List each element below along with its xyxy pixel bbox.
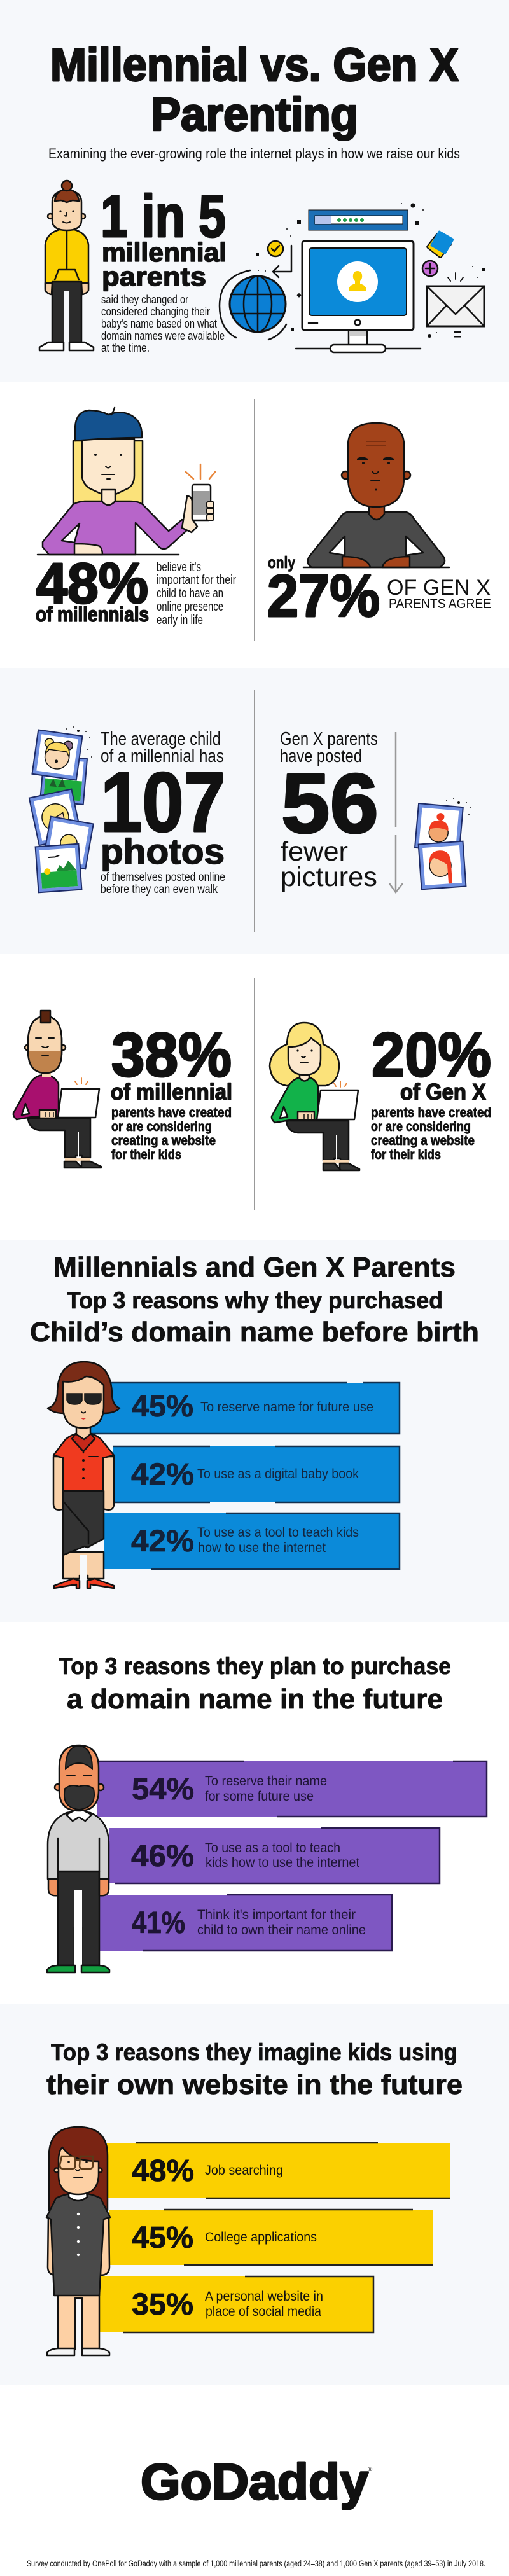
bar: 41% own name xyxy=(99,1895,392,1951)
figure: woman with glasses xyxy=(46,2127,110,2355)
text: online presence belief xyxy=(157,560,236,627)
icon: sparkles xyxy=(256,203,485,338)
text: millennial website xyxy=(111,1105,232,1162)
title: Millennial vs. Gen X xyxy=(50,39,459,91)
bar: 42% baby book: To use as a digital baby book xyxy=(197,1467,359,1481)
heading: their own website in the future xyxy=(46,2069,463,2100)
bar: 46% teach: 46% xyxy=(131,1839,194,1873)
subtitle: Examining the ever-growing role the internet plays in how we raise our kids xyxy=(48,146,460,162)
bar: 45% college applications: College applications xyxy=(205,2230,317,2245)
heading: a domain name in the future xyxy=(67,1684,443,1715)
panel: website creation comparison xyxy=(0,954,509,1240)
figure: woman with phone xyxy=(38,408,215,555)
bar: 48% job searching: Job searching xyxy=(205,2163,283,2178)
stat: 20% of Gen X: 20% xyxy=(372,1020,491,1090)
bar: 45% college applications xyxy=(109,2210,433,2265)
arrow: down xyxy=(389,732,403,892)
heading xyxy=(59,1653,451,1715)
figure: Gen X man xyxy=(303,423,449,567)
heading: Child’s domain name before birth xyxy=(30,1317,479,1348)
bar: 41% own name: Think it's important for their xyxy=(197,1908,356,1922)
stat: only 27% of Gen X: 27% xyxy=(267,562,380,629)
stat: 107 photos: 107 xyxy=(101,756,225,850)
text: fewer pictures: pictures xyxy=(281,862,377,892)
stat: 1 in 5: millennial xyxy=(102,237,227,267)
figure: woman with sunglasses xyxy=(48,1362,120,1588)
panel: intro xyxy=(0,0,509,382)
heading: Top 3 reasons they imagine kids using xyxy=(51,2039,457,2065)
divider xyxy=(254,690,255,932)
text: millennial website: for their kids xyxy=(111,1147,181,1162)
bar: 54% reserve: 54% xyxy=(132,1773,194,1806)
bar: 46% teach: kids how to use the internet xyxy=(206,1855,359,1870)
divider xyxy=(254,399,255,641)
panel: photos comparison xyxy=(0,668,509,954)
heading: Millennials and Gen X Parents xyxy=(53,1252,456,1283)
title xyxy=(50,39,459,141)
bar: 46% teach: To use as a tool to teach xyxy=(205,1841,340,1855)
text: posted online: of themselves posted online xyxy=(101,871,225,884)
text: average child xyxy=(101,729,224,766)
stat: 48% of millennials: 48% xyxy=(36,552,148,616)
panel: reasons kids use websites xyxy=(0,2004,509,2385)
text: online presence belief: important for their xyxy=(157,573,236,587)
text: average child: of a millennial has xyxy=(101,746,224,766)
stat: 38% of millennial: of millennial xyxy=(111,1079,232,1105)
stat: 1 in 5: parents xyxy=(102,261,206,291)
text: Gen X parents: have posted xyxy=(280,746,362,766)
stat: only 27% of Gen X: PARENTS AGREE xyxy=(389,597,491,611)
text: millennial website: creating a website xyxy=(111,1133,216,1148)
bar: 41% own name: child to own their name online xyxy=(197,1923,366,1937)
icon: stack of photos xyxy=(29,726,94,892)
text: Gen X website xyxy=(371,1105,491,1162)
bar: 45% reserve name: 45% xyxy=(132,1390,193,1423)
arrow: monitor to globe xyxy=(273,246,291,277)
text: millennial website: parents have created xyxy=(111,1105,232,1120)
icon: two red-haired photos xyxy=(415,798,471,889)
icon: computer monitor xyxy=(296,241,421,352)
bar: 42% teach kids: how to use the internet xyxy=(198,1541,326,1555)
text: domain name stat: baby's name based on what xyxy=(101,317,217,330)
text: domain name stat: considered changing their xyxy=(101,305,210,318)
bar: 41% own name: 41% xyxy=(132,1906,185,1940)
panel: online presence comparison xyxy=(0,382,509,668)
icon: envelope xyxy=(427,273,484,326)
heading: Top 3 reasons they plan to purchase xyxy=(59,1653,451,1679)
figure: seated man with laptop xyxy=(13,1011,101,1168)
logo: GoDaddy: ® xyxy=(368,2466,373,2473)
text: domain name stat: at the time. xyxy=(101,342,150,354)
text: online presence belief: child to have an xyxy=(157,586,223,600)
figure: man in yellow hoodie xyxy=(39,181,94,350)
figure: seated woman with laptop xyxy=(270,1023,359,1170)
text: online presence belief: believe it's xyxy=(157,560,201,574)
bar: 42% baby book xyxy=(113,1446,400,1502)
text: domain name stat: said they changed or xyxy=(101,293,188,306)
text: millennial website: or are considering xyxy=(111,1119,212,1134)
icon: browser bar xyxy=(309,210,408,230)
stat: 48% of millennials: of millennials xyxy=(36,602,149,626)
text: Gen X website: parents have created xyxy=(371,1105,491,1120)
title: Parenting xyxy=(151,89,358,141)
bar: 35% personal website: 35% xyxy=(132,2288,193,2322)
stat: 38% of millennial: 38% xyxy=(111,1020,232,1090)
stat: 107 photos: photos xyxy=(101,831,225,871)
icon: globe xyxy=(220,270,286,340)
divider xyxy=(254,978,255,1210)
bar: 35% personal website: place of social media xyxy=(206,2304,321,2319)
figure: bearded man xyxy=(47,1745,109,1972)
bar: 42% teach kids: To use as a tool to teach kids xyxy=(197,1525,359,1540)
heading xyxy=(30,1252,479,1348)
text: average child: The average child xyxy=(101,729,221,749)
stat: only 27% of Gen X xyxy=(267,553,491,629)
text: online presence belief: early in life xyxy=(157,613,203,627)
bar: 42% teach kids xyxy=(104,1513,400,1569)
bar: 45% college applications: 45% xyxy=(132,2221,193,2255)
bar: 35% personal website: A personal website in xyxy=(205,2289,323,2304)
stat: only 27% of Gen X: OF GEN X xyxy=(387,576,491,600)
icon: plus badge xyxy=(422,261,438,276)
panel: reasons to purchase in future xyxy=(0,1622,509,2004)
text: domain name stat: domain names were available xyxy=(101,329,225,342)
bar: 35% personal website xyxy=(99,2276,373,2332)
bar: 48% job searching: 48% xyxy=(132,2154,194,2188)
icon: check badge xyxy=(268,241,283,256)
panel: footer xyxy=(0,2385,509,2576)
text: Gen X parents: Gen X parents xyxy=(280,729,378,749)
stat: only 27% of Gen X: only xyxy=(268,553,295,572)
heading: Top 3 reasons why they purchased xyxy=(67,1287,443,1313)
text: fewer pictures: fewer xyxy=(281,836,348,867)
stat: 56: 56 xyxy=(281,757,379,851)
panel: reasons purchased before birth xyxy=(0,1240,509,1622)
bar: 42% teach kids: 42% xyxy=(131,1525,194,1558)
bar: 48% job searching xyxy=(107,2143,450,2198)
text: posted online: before they can even walk xyxy=(101,883,218,896)
stat: 1 in 5 xyxy=(101,183,227,291)
text: Gen X website: creating a website xyxy=(371,1133,475,1148)
bar: 45% reserve name: To reserve name for future use xyxy=(200,1400,373,1415)
heading xyxy=(46,2039,463,2100)
bar: 46% teach xyxy=(109,1828,440,1883)
bar: 42% baby book: 42% xyxy=(131,1458,194,1492)
logo: GoDaddy: GoDaddy xyxy=(141,2453,369,2510)
text: posted online xyxy=(101,871,225,896)
text: Gen X website: or are considering xyxy=(371,1119,471,1134)
bar: 54% reserve: for some future use xyxy=(205,1789,314,1804)
bar: 45% reserve name xyxy=(89,1383,400,1434)
text: domain name stat xyxy=(101,293,225,354)
bar: 54% reserve xyxy=(97,1761,487,1817)
stat: 1 in 5: 1 in 5 xyxy=(101,183,226,249)
bar: 54% reserve: To reserve their name xyxy=(205,1774,327,1789)
stat: 20% of Gen X: of Gen X xyxy=(400,1079,486,1105)
text: online presence belief: online presence xyxy=(157,600,223,614)
text: Gen X website: for their kids xyxy=(371,1147,441,1162)
text: fewer pictures xyxy=(281,836,377,892)
text: Gen X parents xyxy=(280,729,378,766)
icon: cards xyxy=(426,230,454,258)
